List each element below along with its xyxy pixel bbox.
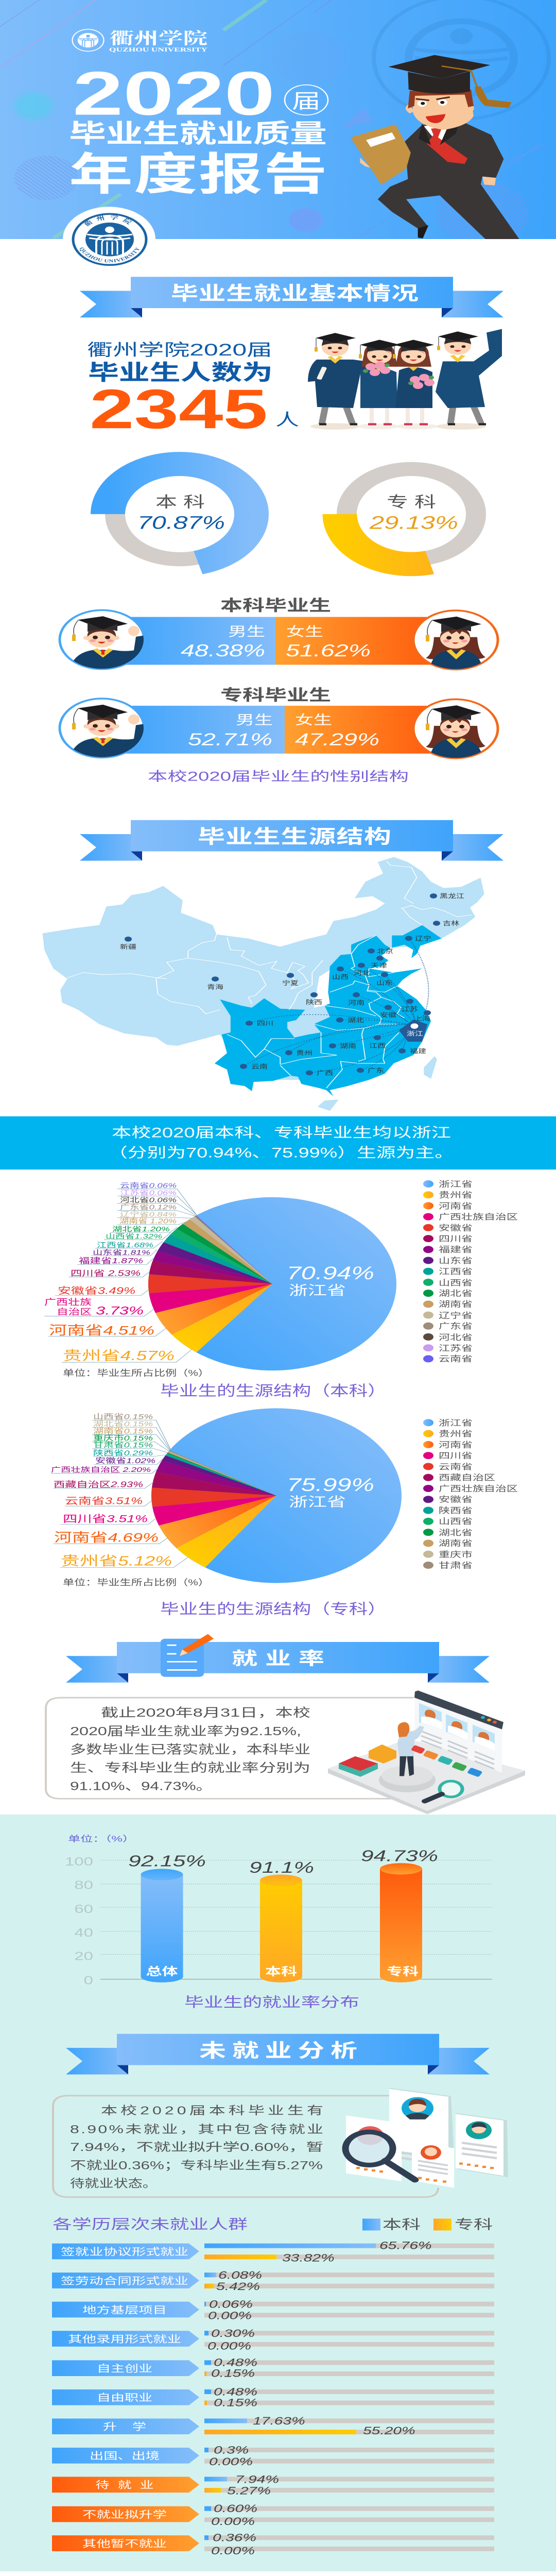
grid lines xyxy=(100,1860,492,1954)
heading: 专科毕业生 xyxy=(220,686,331,704)
slice labels: 江苏省0.06% xyxy=(120,1189,177,1197)
row: other hiring: 0.00% xyxy=(207,2341,251,2352)
map labels: 陕西 xyxy=(306,999,322,1005)
row: freelance: 0.48% xyxy=(214,2386,257,2398)
slice labels: 福建省1.87% xyxy=(79,1257,143,1265)
axis labels: 80 xyxy=(74,1878,93,1892)
slice labels: 河南省4.51% xyxy=(49,1324,154,1337)
row: labour contract: 5.42% xyxy=(216,2281,260,2293)
summary text xyxy=(70,1706,310,1793)
slice labels: 江西省1.68% xyxy=(97,1241,153,1249)
donut label: 本科 xyxy=(155,494,205,511)
legend: 湖南省 xyxy=(439,1539,473,1548)
male avatar xyxy=(60,699,145,758)
map shapes xyxy=(43,857,484,1111)
source summary band: （分别为70.94%、75.99%）生源为主。 xyxy=(108,1145,454,1160)
legend: 浙江省 xyxy=(439,1418,473,1428)
male avatar xyxy=(60,610,145,670)
illustration: employment dashboard xyxy=(328,1690,525,1814)
chart legend: 本科 xyxy=(383,2217,421,2232)
row: awaiting employment xyxy=(52,2473,494,2497)
row: self-employment: 自主创业 xyxy=(97,2363,152,2374)
row: agreement employment: 签就业协议形式就业 xyxy=(61,2246,188,2257)
legend: 湖北省 xyxy=(439,1289,473,1298)
slice labels: 山西省1.32% xyxy=(106,1233,162,1240)
row: going abroad: 0.3% xyxy=(214,2445,249,2456)
axis labels: 60 xyxy=(74,1903,93,1916)
slice labels xyxy=(51,1412,172,1568)
slice labels: 安徽省1.02% xyxy=(95,1456,155,1465)
slice labels: 3.73% xyxy=(96,1304,144,1317)
panel: employment summary xyxy=(46,1698,414,1799)
unit label: 单位：（%） xyxy=(68,1835,135,1843)
icon: notepad and pencil xyxy=(161,1634,214,1677)
map labels: 辽宁 xyxy=(415,935,431,942)
gender bar: associate: 47.29% xyxy=(295,730,379,749)
unit note: 单位：毕业生所占比例（%） xyxy=(63,1578,210,1587)
row: local grassroots xyxy=(52,2299,494,2322)
row: freelance xyxy=(52,2386,494,2409)
illustration: four graduates xyxy=(308,329,502,430)
pie chart: associate source xyxy=(51,1408,518,1617)
axis labels: 100 xyxy=(65,1855,93,1869)
map labels: 河北 xyxy=(354,970,370,976)
row: further study: 55.20% xyxy=(363,2425,415,2437)
female text: 女生 xyxy=(295,713,332,727)
pie centre value: 75.99% xyxy=(287,1475,374,1495)
section banner: unemployment analysis xyxy=(66,2034,490,2075)
slice labels: 河北省0.06% xyxy=(120,1196,177,1204)
illustration: resumes and magnifier xyxy=(345,2088,508,2188)
legend: 广西壮族自治区 xyxy=(439,1212,518,1222)
pie centre label: 浙江省 xyxy=(289,1283,346,1298)
section banner: basic situation: 毕业生就业基本情况 xyxy=(171,283,419,304)
slice labels: 广西壮族自治区 2.20% xyxy=(51,1466,151,1473)
row: other hiring: 0.30% xyxy=(211,2328,255,2340)
legend: 湖北省 xyxy=(439,1528,473,1537)
row: planning further study: 不就业拟升学 xyxy=(82,2509,167,2520)
summary text: 2020届毕业生就业率为92.15%, xyxy=(70,1725,301,1738)
legend: 山东省 xyxy=(439,1256,473,1265)
chart legend: 专科 xyxy=(455,2217,493,2232)
map labels: 北京 xyxy=(377,948,393,954)
row: self-employment xyxy=(52,2357,494,2379)
axis labels: 40 xyxy=(74,1926,93,1940)
title line 3: 年度报告 xyxy=(69,149,327,199)
map labels: 吉林 xyxy=(443,921,459,927)
row: awaiting employment: 5.27% xyxy=(227,2485,271,2497)
legend: 云南省 xyxy=(439,1462,473,1471)
legend: 山西省 xyxy=(439,1517,473,1526)
summary text: 8.90%未就业，其中包含待就业 xyxy=(70,2123,323,2136)
chart caption: 毕业生的生源结构（专科） xyxy=(160,1601,387,1617)
slice labels: 自治区 xyxy=(57,1308,92,1316)
section banner: unemployment analysis: 未就业分析 xyxy=(199,2040,357,2061)
row: local grassroots: 地方基层项目 xyxy=(82,2304,167,2315)
summary text: 待就业状态。 xyxy=(70,2177,157,2190)
decorative shapes xyxy=(0,0,546,246)
legend: 浙江省 xyxy=(439,1180,473,1189)
section banner: employment rate xyxy=(66,1634,490,1683)
logo xyxy=(72,29,207,53)
legend: 湖南省 xyxy=(439,1300,473,1309)
donut label: 专科 xyxy=(387,494,436,511)
mint section background xyxy=(0,1815,556,2571)
legend: 贵州省 xyxy=(439,1429,473,1438)
legend: 陕西省 xyxy=(439,1506,473,1515)
slice labels: 甘肃省0.15% xyxy=(93,1441,153,1449)
summary text: 截止2020年8月31日，本校 xyxy=(101,1706,310,1720)
gender bar: undergraduate: 51.62% xyxy=(286,641,371,660)
donut chart: undergraduate xyxy=(108,464,251,564)
gender bar: associate xyxy=(60,686,498,759)
slice labels: 河南省4.69% xyxy=(54,1530,159,1545)
legend: 江西省 xyxy=(439,1267,473,1276)
map labels: 黑龙江 xyxy=(440,893,464,900)
row: freelance: 0.15% xyxy=(214,2397,257,2409)
chart heading: unemployed groups: 各学历层次未就业人群 xyxy=(53,2216,248,2232)
summary text: 不就业0.36%；专科毕业生有5.27% xyxy=(70,2159,323,2172)
female segment xyxy=(275,617,440,665)
logo name: 衢州学院 xyxy=(110,30,207,47)
row: labour contract: 签劳动合同形式就业 xyxy=(61,2275,188,2286)
slice labels: 湖北省1.20% xyxy=(112,1226,170,1233)
slice labels: 重庆市0.15% xyxy=(93,1434,153,1442)
donut value: 29.13% xyxy=(369,513,458,533)
map labels: 江苏 xyxy=(402,1006,418,1012)
legend: 辽宁省 xyxy=(439,1311,473,1320)
gender bar: undergraduate xyxy=(60,597,498,670)
row: further study: 17.63% xyxy=(253,2415,305,2427)
map labels: 江西 xyxy=(369,1043,386,1049)
map labels: 贵州 xyxy=(296,1050,312,1056)
row: local grassroots: 0.06% xyxy=(209,2299,253,2310)
male text: 男生 xyxy=(236,713,273,727)
pie slices xyxy=(151,1408,402,1583)
legend: 江苏省 xyxy=(439,1344,473,1353)
map labels: 天津 xyxy=(371,962,387,969)
legend: 甘肃省 xyxy=(439,1561,473,1570)
pie centre label: 浙江省 xyxy=(289,1494,346,1510)
legend: 广西壮族自治区 xyxy=(439,1484,518,1494)
legend: 福建省 xyxy=(439,1245,473,1255)
legend: 云南省 xyxy=(439,1354,473,1364)
watermark seal xyxy=(374,0,549,119)
map labels: 上海 xyxy=(414,1015,430,1022)
legend: 河南省 xyxy=(439,1201,473,1211)
map labels: 山西 xyxy=(332,974,349,980)
total line 1: 衢州学院2020届 xyxy=(87,341,272,359)
row: freelance: 自由职业 xyxy=(97,2392,152,2403)
logo emblem xyxy=(72,29,104,51)
row: other not employed: 其他暂不就业 xyxy=(82,2538,167,2549)
donut chart: associate xyxy=(340,464,483,564)
summary text: 生、专科毕业生的就业率分别为 xyxy=(70,1761,310,1775)
row: planning further study: 0.00% xyxy=(211,2516,255,2528)
axis line xyxy=(100,1978,492,1980)
bar: overall: 92.15% xyxy=(128,1853,206,1870)
map labels: 宁夏 xyxy=(282,980,299,987)
gender bar: associate: 52.71% xyxy=(188,730,272,749)
title year: 2020 xyxy=(73,59,275,128)
row: planning further study xyxy=(52,2503,494,2528)
source summary band: 本校2020届本科、专科毕业生均以浙江 xyxy=(112,1125,451,1140)
total line 2: 毕业生人数为 xyxy=(88,361,273,385)
legend: 重庆市 xyxy=(439,1550,473,1559)
logo english: QUZHOU UNIVERSITY xyxy=(109,46,207,53)
map labels: 广西 xyxy=(317,1070,333,1076)
female text: 女生 xyxy=(286,624,323,639)
pie slices xyxy=(148,1197,396,1370)
map labels: 广东 xyxy=(368,1067,384,1074)
row: local grassroots: 0.00% xyxy=(208,2310,252,2322)
female segment xyxy=(285,706,440,754)
bar: undergraduate: 本科 xyxy=(265,1965,297,1978)
row: further study: 升 学 xyxy=(103,2421,146,2432)
legend: 西藏自治区 xyxy=(439,1473,495,1482)
graduate in suit illustration xyxy=(351,55,519,240)
slice labels: 湖北省0.15% xyxy=(93,1419,153,1428)
row: self-employment: 0.15% xyxy=(211,2368,255,2379)
male text: 男生 xyxy=(228,624,265,639)
section banner: basic situation xyxy=(80,277,503,317)
row: agreement employment: 33.82% xyxy=(282,2252,335,2264)
row: agreement employment: 65.76% xyxy=(379,2240,432,2252)
total unit: 人 xyxy=(275,411,299,429)
title line 2: 毕业生就业质量 xyxy=(69,120,327,148)
legend: 广东省 xyxy=(439,1321,473,1331)
slice labels: 西藏自治区2.93% xyxy=(54,1480,143,1489)
section banner: source structure xyxy=(80,820,503,861)
caption: gender structure: 本校2020届毕业生的性别结构 xyxy=(148,769,409,784)
bar: overall: 总体 xyxy=(146,1965,178,1978)
map labels: 山东 xyxy=(376,980,393,986)
map labels: 四川 xyxy=(257,1021,273,1027)
bar: associate: 94.73% xyxy=(361,1848,438,1865)
heading: 本科毕业生 xyxy=(220,597,331,614)
seal badge xyxy=(63,207,155,272)
row: other not employed: 0.00% xyxy=(211,2545,255,2557)
map labels: 河南 xyxy=(348,999,364,1006)
slice labels: 贵州省4.57% xyxy=(63,1348,175,1363)
pie chart: undergraduate source xyxy=(44,1180,518,1399)
slice labels: 辽宁省0.84% xyxy=(120,1211,177,1218)
row: going abroad: 出国、出境 xyxy=(90,2450,160,2461)
slice labels: 陕西省0.29% xyxy=(93,1449,153,1457)
summary text: 91.10%、94.73%。 xyxy=(70,1780,212,1793)
bar: associate xyxy=(361,1848,438,1982)
summary text: 多数毕业生已落实就业，本科毕业 xyxy=(70,1743,310,1756)
slice labels: 山西省0.15% xyxy=(93,1412,153,1421)
map labels: 湖南 xyxy=(340,1043,356,1049)
row: labour contract: 6.08% xyxy=(218,2269,262,2281)
legend: 贵州省 xyxy=(439,1191,473,1200)
row: other not employed: 0.36% xyxy=(213,2532,256,2544)
bar: associate: 专科 xyxy=(387,1965,419,1978)
source summary band xyxy=(0,1116,556,1170)
legend: 河北省 xyxy=(439,1333,473,1342)
row: other hiring xyxy=(52,2328,494,2352)
slice labels xyxy=(44,1182,177,1363)
row: self-employment: 0.48% xyxy=(214,2357,257,2368)
chart legend xyxy=(362,2217,493,2232)
row: other hiring: 其他录用形式就业 xyxy=(68,2333,181,2344)
section banner: employment rate: 就业率 xyxy=(232,1649,324,1669)
donut value: 70.87% xyxy=(137,513,225,533)
legend: 安徽省 xyxy=(439,1224,473,1233)
title badge xyxy=(285,85,328,115)
destination bar chart xyxy=(52,2240,494,2557)
slice labels: 贵州省5.12% xyxy=(61,1553,172,1568)
legend: 四川省 xyxy=(439,1234,473,1244)
slice labels: 山东省1.81% xyxy=(93,1249,150,1257)
summary text: 本校2020届本科毕业生有 xyxy=(101,2104,323,2117)
slice labels: 四川省 2.53% xyxy=(71,1269,141,1278)
legend: 山西省 xyxy=(439,1278,473,1287)
legend xyxy=(423,1418,518,1570)
row: labour contract xyxy=(52,2269,494,2293)
graduate total xyxy=(87,341,299,440)
row: further study xyxy=(52,2415,494,2437)
section banner: source structure: 毕业生生源结构 xyxy=(198,826,391,848)
pie centre value: 70.94% xyxy=(287,1263,374,1283)
leader lines xyxy=(44,1189,197,1362)
row: going abroad: 0.00% xyxy=(209,2456,253,2468)
leader lines xyxy=(51,1420,188,1568)
map labels: 安徽 xyxy=(380,1012,396,1019)
male segment xyxy=(124,706,285,754)
axis labels xyxy=(65,1855,93,1987)
map dots xyxy=(125,893,440,1075)
row: going abroad xyxy=(52,2445,494,2468)
slice labels: 云南省3.51% xyxy=(65,1496,143,1506)
slice labels: 云南省0.06% xyxy=(120,1182,177,1190)
map labels: 福建 xyxy=(410,1048,426,1054)
female avatar xyxy=(413,611,498,670)
bar: undergraduate xyxy=(249,1859,314,1982)
row: awaiting employment: 7.94% xyxy=(235,2473,279,2485)
unit note: 单位：毕业生所占比例（%） xyxy=(63,1368,210,1378)
chart caption: 毕业生的就业率分布 xyxy=(184,1994,359,2010)
title badge: 届 xyxy=(292,90,321,113)
row: planning further study: 0.60% xyxy=(214,2503,257,2515)
bar: undergraduate: 91.1% xyxy=(249,1859,314,1876)
gender bar: undergraduate: 48.38% xyxy=(181,641,265,660)
header panel xyxy=(0,0,556,246)
map labels: 云南 xyxy=(251,1063,268,1070)
row: agreement employment xyxy=(52,2240,494,2264)
total number: 2345 xyxy=(90,378,268,440)
row: other not employed xyxy=(52,2532,494,2557)
legend: 河南省 xyxy=(439,1440,473,1450)
slice labels: 广东省0.12% xyxy=(120,1204,177,1211)
map labels: 浙江 xyxy=(407,1030,423,1037)
slice labels: 广西壮族 xyxy=(44,1298,92,1307)
summary text xyxy=(70,2104,323,2190)
male segment xyxy=(124,617,275,665)
slice labels: 安徽省3.49% xyxy=(58,1285,135,1296)
map labels: 湖北 xyxy=(348,1017,364,1023)
row: awaiting employment: 待就业 xyxy=(95,2480,153,2490)
bar: overall xyxy=(128,1853,206,1982)
map of China xyxy=(43,857,484,1111)
female avatar xyxy=(413,699,498,759)
map labels: 新疆 xyxy=(120,944,136,950)
chart caption: 毕业生的生源结构（本科） xyxy=(160,1383,387,1399)
slice labels: 湖南省 1.20% xyxy=(119,1217,177,1225)
map labels: 青海 xyxy=(207,984,223,990)
axis labels: 20 xyxy=(74,1950,93,1963)
legend: 四川省 xyxy=(439,1451,473,1460)
bar chart: employment rate xyxy=(65,1835,492,2010)
slice labels: 四川省3.51% xyxy=(63,1514,148,1524)
panel: unemployment summary xyxy=(53,2096,438,2197)
slice labels: 湖南省0.15% xyxy=(93,1427,153,1435)
legend: 安徽省 xyxy=(439,1495,473,1504)
legend xyxy=(423,1180,518,1364)
map labels xyxy=(120,893,464,1076)
summary text: 7.94%，不就业拟升学0.60%，暂 xyxy=(70,2141,323,2154)
axis labels: 0 xyxy=(84,1974,93,1987)
